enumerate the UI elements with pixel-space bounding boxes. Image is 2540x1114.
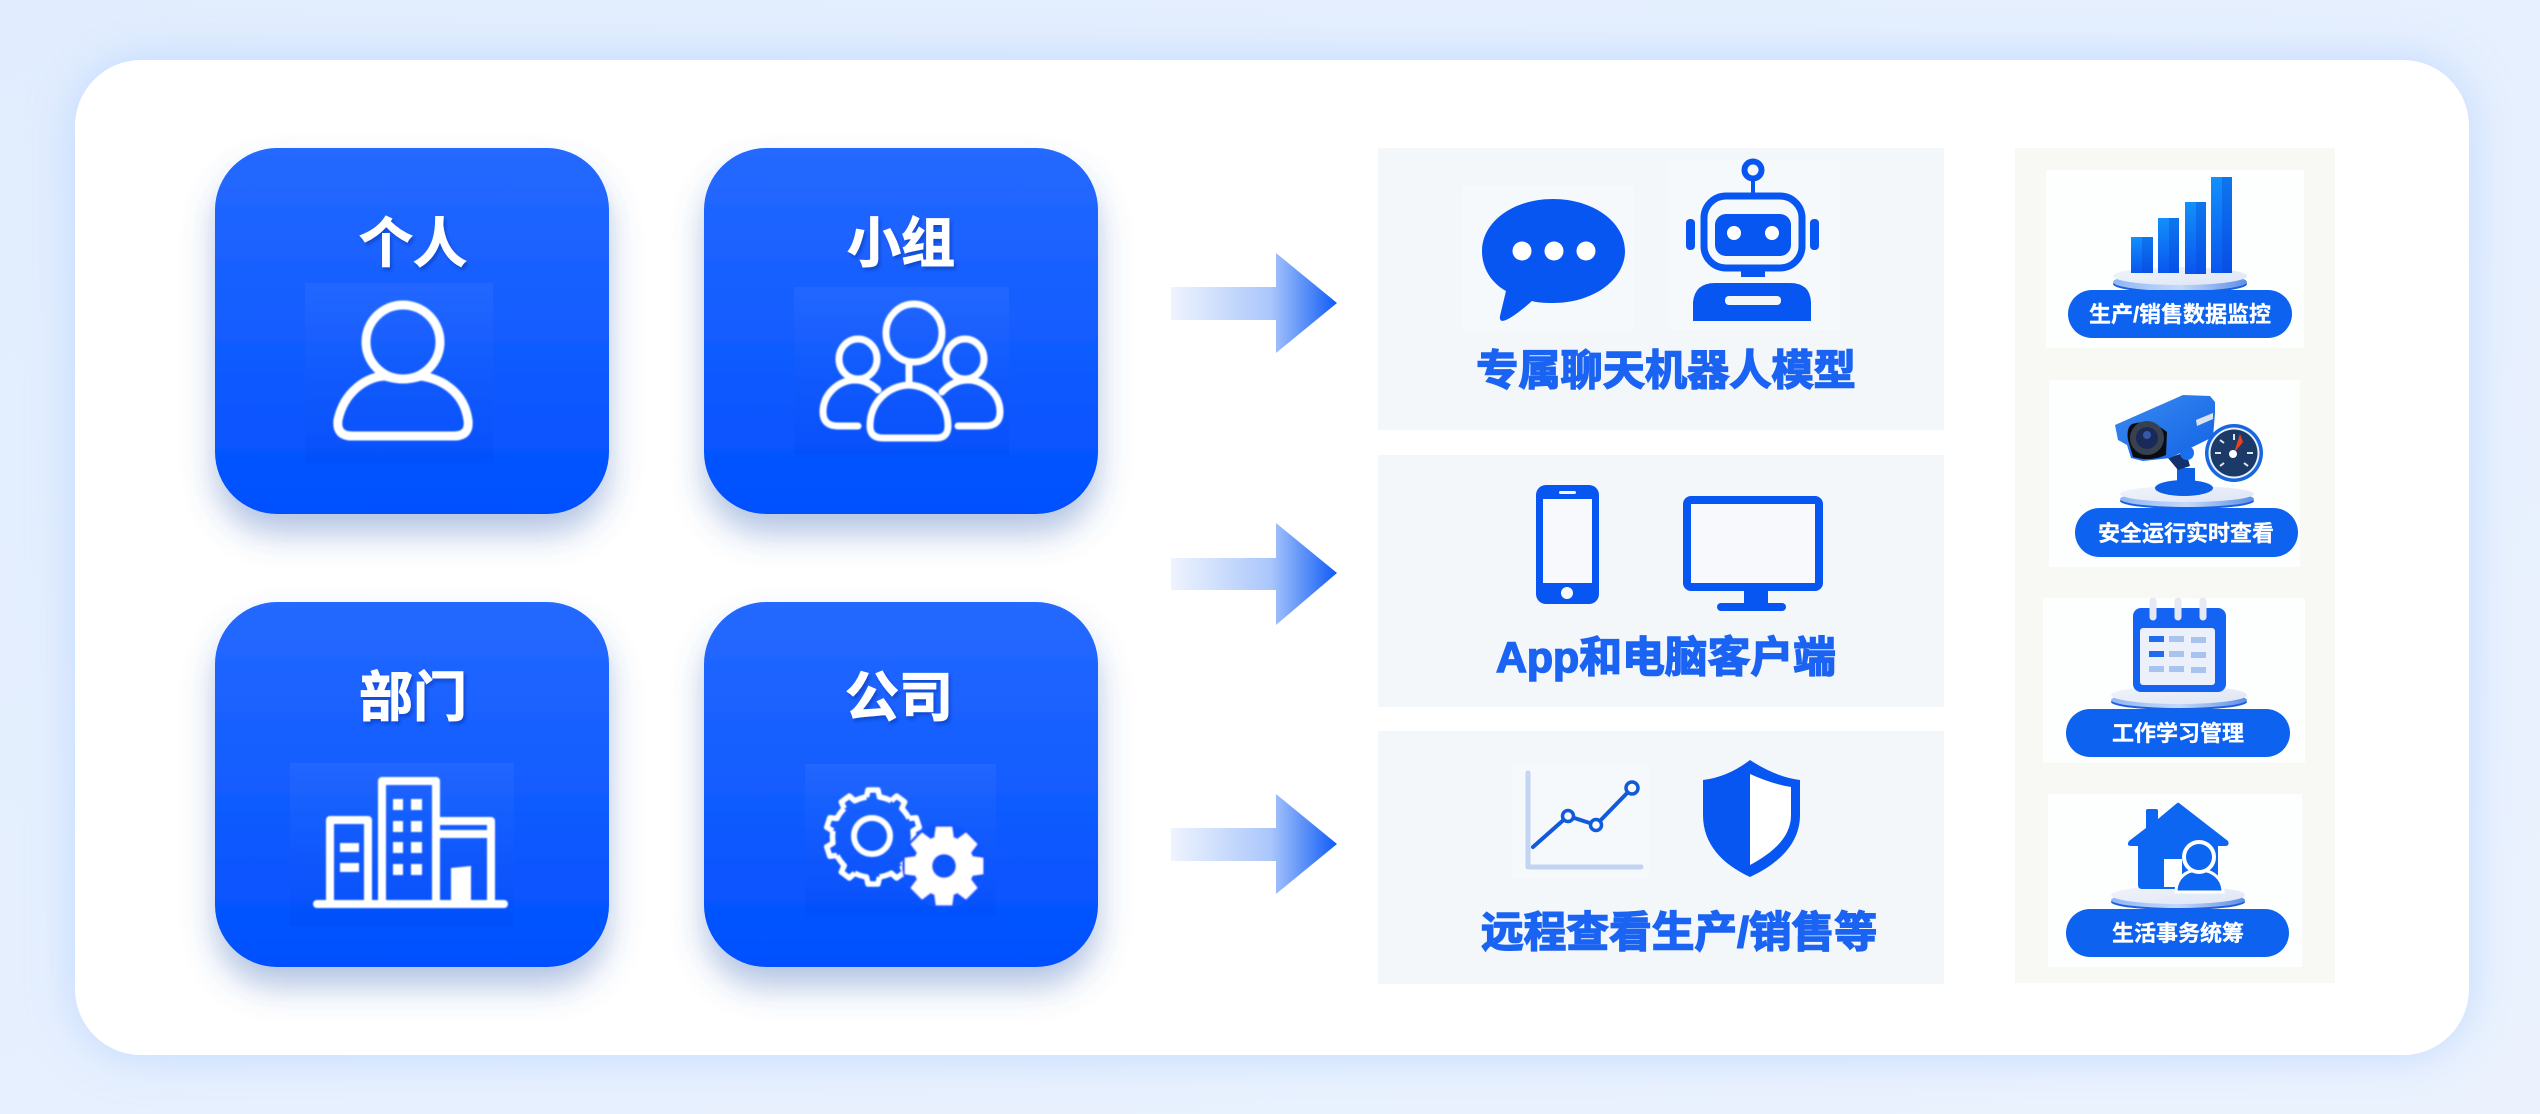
label pill xyxy=(2066,709,2290,757)
arrow: middle xyxy=(1171,523,1337,625)
card: 小组 xyxy=(704,148,1098,514)
icon: line chart xyxy=(1528,773,1641,867)
icon: monitor xyxy=(1687,500,1819,611)
panel: remote monitoring xyxy=(1378,731,1944,984)
card: 个人 xyxy=(215,148,609,514)
icon: phone xyxy=(1536,485,1599,604)
icon: house with person on platform xyxy=(2111,803,2245,910)
label pill: 生产/销售数据监控 xyxy=(2089,302,2271,327)
icon: gears xyxy=(823,788,986,908)
label: 专属聊天机器人模型: 专属聊天机器人模型 xyxy=(1476,347,1856,394)
item: life affairs coordination xyxy=(2048,794,2302,967)
label pill: 安全运行实时查看 xyxy=(2098,521,2274,546)
panel: chatbot model xyxy=(1378,148,1944,430)
icon: bar chart on platform xyxy=(2113,177,2247,293)
label: App和电脑客户端: App和电脑客户端 xyxy=(1496,634,1836,682)
label pill xyxy=(2068,290,2292,338)
icon: buildings xyxy=(313,781,508,908)
heading: 个人: 个人 xyxy=(359,214,467,274)
panel: app and desktop clients xyxy=(1378,455,1944,707)
label: 远程查看生产/销售等: 远程查看生产/销售等 xyxy=(1481,909,1877,957)
label pill: 工作学习管理 xyxy=(2112,721,2244,746)
label pill xyxy=(2075,508,2298,557)
icon: calendar on platform xyxy=(2111,601,2247,710)
heading: 部门: 部门 xyxy=(359,668,467,728)
icon: chat bubble xyxy=(1482,199,1625,321)
icon: camera with gauge xyxy=(2115,395,2263,509)
card: 公司 xyxy=(704,602,1098,967)
item: work and study management xyxy=(2043,598,2305,763)
label pill: 生活事务统筹 xyxy=(2112,921,2244,946)
icon: robot xyxy=(1686,162,1819,321)
icon: shield xyxy=(1703,760,1800,877)
item: real-time safety monitoring xyxy=(2049,380,2300,567)
icon: group of people xyxy=(823,304,1000,438)
icon: person xyxy=(338,305,468,436)
heading: 公司: 公司 xyxy=(845,668,953,728)
panel: right column use cases xyxy=(2015,148,2335,983)
label pill xyxy=(2066,909,2289,957)
heading: 小组: 小组 xyxy=(847,214,955,274)
item: production and sales data monitoring xyxy=(2046,170,2304,348)
card: 部门 xyxy=(215,602,609,967)
arrow: bottom xyxy=(1171,794,1337,894)
arrow: top xyxy=(1171,253,1337,353)
